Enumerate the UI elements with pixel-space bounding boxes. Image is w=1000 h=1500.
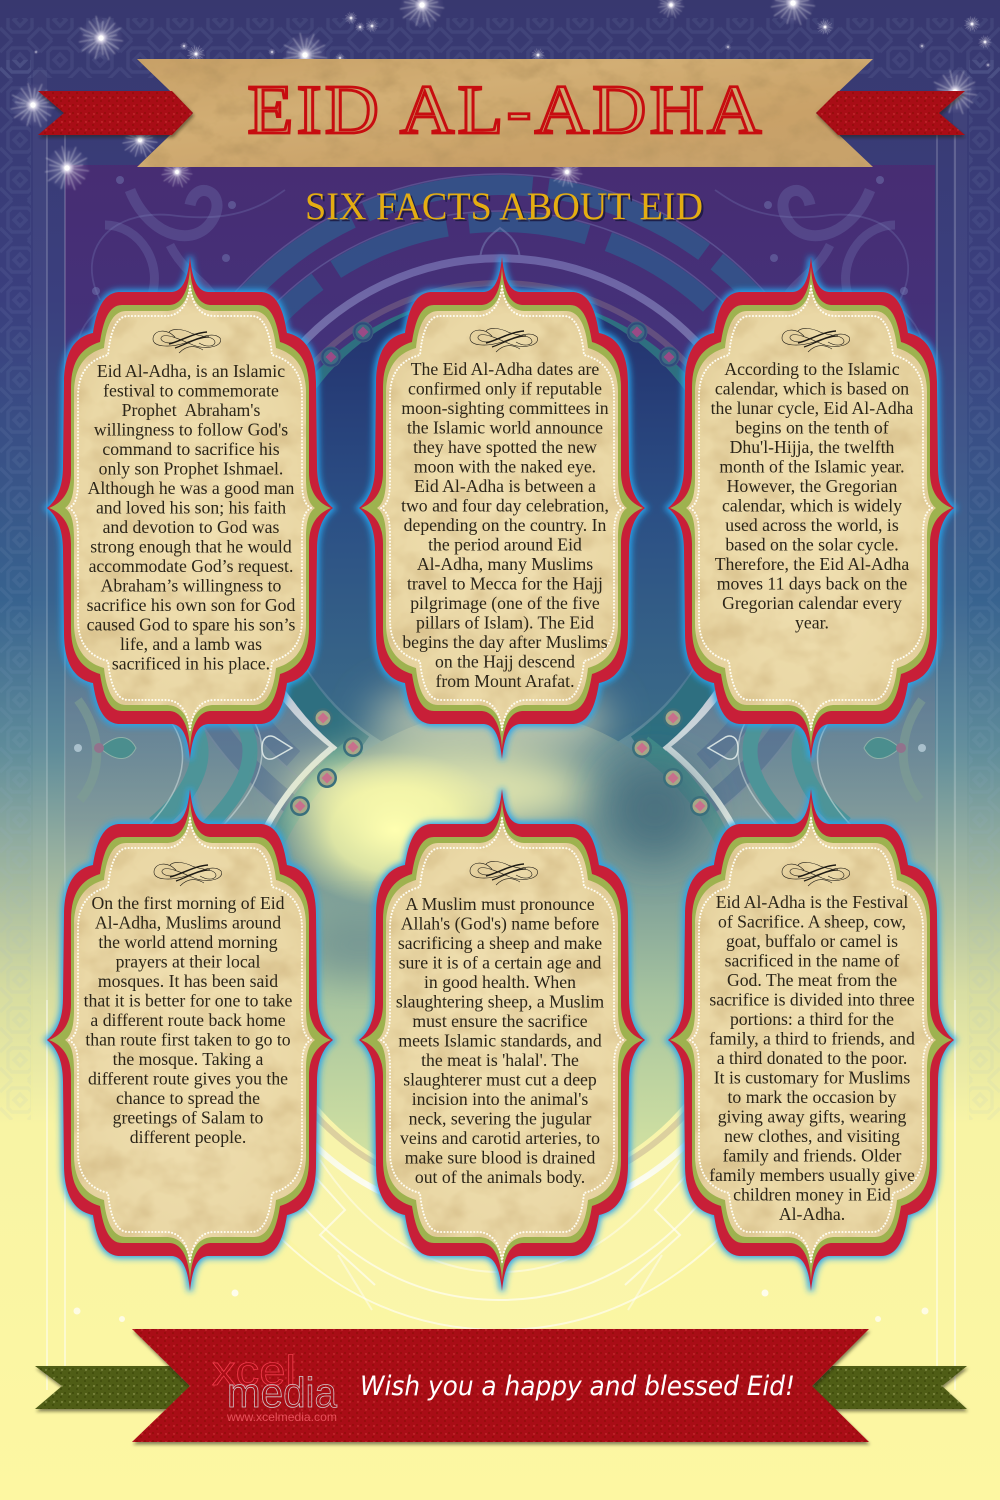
fact 1 text: and loved his son; his faith xyxy=(96,498,286,518)
fact 3 text: month of the Islamic year. xyxy=(719,456,905,476)
fact 5 text: make sure blood is drained xyxy=(405,1148,595,1168)
fact 3 text: Gregorian calendar every xyxy=(722,593,902,613)
arch ring and teal band xyxy=(228,258,772,1220)
fact 6 text: Eid Al-Adha is the Festival xyxy=(716,892,908,912)
subtitle: SIX FACTS ABOUT EID xyxy=(307,187,705,230)
fact 1 text: caused God to spare his son’s xyxy=(87,614,296,634)
fact 2 text: The Eid Al-Adha dates are xyxy=(411,359,599,379)
fact 6 text: Al-Adha. xyxy=(779,1204,845,1224)
lower knot rings xyxy=(74,750,928,1330)
lower side ornaments xyxy=(65,640,935,900)
fact 4 text: Al-Adha, Muslims around xyxy=(95,912,281,932)
fact 6 text: family, a third to friends, and xyxy=(709,1028,915,1048)
fact 2 text: the Islamic world announce xyxy=(407,418,603,438)
fact 1 text: willingness to follow God's xyxy=(94,420,288,440)
fact 3 text: begins on the tenth of xyxy=(735,418,889,438)
fact 3 text: However, the Gregorian xyxy=(727,476,897,496)
fact 3 text: calendar, which is widely xyxy=(722,496,902,516)
fact 1 text: accommodate God’s request. xyxy=(89,556,293,576)
flourish xyxy=(782,862,850,886)
fact 2 text: from Mount Arafat. xyxy=(435,671,575,691)
fact 3 text: Therefore, the Eid Al-Adha xyxy=(715,554,909,574)
fact 6 text: sacrifice is divided into three xyxy=(709,990,915,1010)
fact 3 text: based on the solar cycle. xyxy=(725,534,899,554)
fact 2 text: begins the day after Muslims xyxy=(402,632,608,652)
fact 3 text: year. xyxy=(795,612,829,632)
title banner xyxy=(38,59,965,167)
fact 2 text xyxy=(401,359,609,691)
fact 2 text: moon with the naked eye. xyxy=(414,456,596,476)
fact 2 text: pillars of Islam). The Eid xyxy=(416,612,594,632)
fact 4 text: the mosque. Taking a xyxy=(113,1049,264,1069)
panel: fact 1 xyxy=(47,257,333,759)
fact 1 text: Prophet Abraham's xyxy=(122,400,260,420)
footer banner xyxy=(35,1329,967,1442)
fact 1 text: only son Prophet Ishmael. xyxy=(99,458,283,478)
fact 4 text: different route gives you the xyxy=(88,1068,288,1088)
fact 5 text: in good health. When xyxy=(424,972,576,992)
fact 5 text: out of the animals body. xyxy=(415,1167,585,1187)
fact 3 text: Dhu'l-Hijja, the twelfth xyxy=(730,437,895,457)
panel: fact 6 xyxy=(668,789,954,1291)
logo: xcel media: www.xcelmedia.com xyxy=(226,1410,337,1424)
fact 5 text: sure it is of a certain age and xyxy=(399,952,602,972)
stars xyxy=(11,0,992,190)
fact 5 text: A Muslim must pronounce xyxy=(405,894,595,914)
logo: xcel media: media xyxy=(227,1369,338,1416)
flourish xyxy=(153,329,221,353)
fact 6 text: sacrificed in the name of xyxy=(725,950,900,970)
fact 6 text: new clothes, and visiting xyxy=(724,1126,900,1146)
logo: xcel media xyxy=(212,1347,338,1424)
fact 1 text: and devotion to God was xyxy=(103,517,280,537)
fact 6 text: of Sacrifice. A sheep, cow, xyxy=(718,912,906,932)
fact 2 text: depending on the country. In xyxy=(404,515,607,535)
central sky disc xyxy=(260,295,740,1190)
background ornaments: concentric rings xyxy=(144,174,856,886)
fact 3 text: According to the Islamic xyxy=(724,359,900,379)
fact 1 text: Abraham’s willingness to xyxy=(101,576,282,596)
red ribbon xyxy=(132,1329,869,1442)
fact 4 text: mosques. It has been said xyxy=(98,971,278,991)
panel: fact 4 xyxy=(47,789,333,1291)
fact 2 text: they have spotted the new xyxy=(413,437,597,457)
fact 2 text: Eid Al-Adha is between a xyxy=(414,476,596,496)
fact 6 text: a third donated to the poor. xyxy=(717,1048,907,1068)
fact 4 text: different people. xyxy=(130,1127,246,1147)
clouds and moon glow xyxy=(280,540,705,977)
fact 2 text: moon-sighting committees in xyxy=(401,398,609,418)
left green ribbon xyxy=(35,1366,190,1409)
fact 1 text: Eid Al-Adha, is an Islamic xyxy=(97,361,285,381)
fact 1 text: strong enough that he would xyxy=(90,536,292,556)
fact 3 text: the lunar cycle, Eid Al-Adha xyxy=(711,398,914,418)
fact 5 text: neck, severing the jugular xyxy=(409,1108,591,1128)
fact 5 text: incision into the animal's xyxy=(412,1089,588,1109)
background ornaments: upper florals xyxy=(75,176,925,360)
fact 6 text: family members usually give xyxy=(709,1165,915,1185)
flourish xyxy=(470,861,538,885)
fact 5 text: must ensure the sacrifice xyxy=(412,1011,588,1031)
fact 2 text: Al-Adha, many Muslims xyxy=(417,554,593,574)
flourish xyxy=(782,328,850,352)
fact 6 text: family and friends. Older xyxy=(723,1146,901,1166)
parchment ribbon xyxy=(137,59,873,167)
fact 2 text: travel to Mecca for the Hajj xyxy=(407,574,603,594)
subtitle: SIX FACTS ABOUT EID xyxy=(305,185,703,228)
right red ribbon xyxy=(816,91,965,135)
fact 6 text: to mark the occasion by xyxy=(728,1087,897,1107)
fact 6 text xyxy=(709,892,915,1224)
fact 1 text: command to sacrifice his xyxy=(102,439,280,459)
fact 1 text: festival to commemorate xyxy=(103,380,279,400)
fact 6 text: It is customary for Muslims xyxy=(714,1068,910,1088)
heading: Eid Al-Adha: EID AL-ADHA xyxy=(246,72,765,149)
fact 6 text: God. The meat from the xyxy=(727,970,897,990)
fact 5 text: slaughterer must cut a deep xyxy=(403,1070,597,1090)
fact 3 text: calendar, which is based on xyxy=(715,378,909,398)
flourish xyxy=(470,328,538,352)
fact 2 text: the period around Eid xyxy=(428,534,582,554)
band rosettes xyxy=(290,322,710,816)
fact 1 text: Although he was a good man xyxy=(88,478,295,498)
fact 5 text: sacrificing a sheep and make xyxy=(398,933,602,953)
panel: fact 5 xyxy=(359,789,645,1291)
fact 6 text: children money in Eid xyxy=(733,1184,891,1204)
right green ribbon xyxy=(812,1366,967,1409)
flourish xyxy=(154,862,222,886)
fact 5 text: the meat is 'halal'. The xyxy=(421,1050,579,1070)
fact 6 text: portions: a third for the xyxy=(730,1009,894,1029)
fact 4 text: On the first morning of Eid xyxy=(91,893,285,913)
left red ribbon xyxy=(38,91,193,135)
fact 1 text: sacrifice his own son for God xyxy=(87,595,296,615)
fact 1 text: life, and a lamb was xyxy=(120,634,262,654)
fact 1 text: sacrificed in his place. xyxy=(112,654,270,674)
fact 1 text xyxy=(87,361,296,674)
message: Wish you a happy and blessed Eid! xyxy=(360,1371,795,1402)
fact 4 text: than route first taken to go to xyxy=(85,1030,291,1050)
fact 3 text: moves 11 days back on the xyxy=(717,574,907,594)
fact 4 text: prayers at their local xyxy=(116,952,261,972)
fact 2 text: on the Hajj descend xyxy=(435,652,575,672)
fact 6 text: giving away gifts, wearing xyxy=(718,1106,906,1126)
fact 3 text: used across the world, is xyxy=(725,515,899,535)
fact 5 text xyxy=(396,894,604,1187)
panel: fact 3 xyxy=(668,257,954,759)
fact 4 text: the world attend morning xyxy=(98,932,278,952)
fact 2 text: confirmed only if reputable xyxy=(408,378,602,398)
fact 4 text: greetings of Salam to xyxy=(113,1108,264,1128)
heading: Eid Al-Adha: EID AL-ADHA xyxy=(248,72,764,149)
fact 4 text: chance to spread the xyxy=(116,1088,260,1108)
panel: fact 2 xyxy=(359,257,645,759)
fact 2 text: two and four day celebration, xyxy=(401,496,609,516)
fact 4 text: a different route back home xyxy=(90,1010,286,1030)
fact 6 text: goat, buffalo or camel is xyxy=(726,931,898,951)
fact 4 text: that it is better for one to take xyxy=(84,990,293,1010)
fact 3 text xyxy=(711,359,914,632)
fact 5 text: Allah's (God's) name before xyxy=(401,914,599,934)
fact 4 text xyxy=(84,893,293,1147)
fact 5 text: slaughtering sheep, a Muslim xyxy=(396,992,604,1012)
fact 5 text: meets Islamic standards, and xyxy=(398,1030,602,1050)
fact 2 text: pilgrimage (one of the five xyxy=(410,593,600,613)
fact 5 text: veins and carotid arteries, to xyxy=(400,1128,600,1148)
logo: xcel media: xcel xyxy=(212,1347,296,1394)
